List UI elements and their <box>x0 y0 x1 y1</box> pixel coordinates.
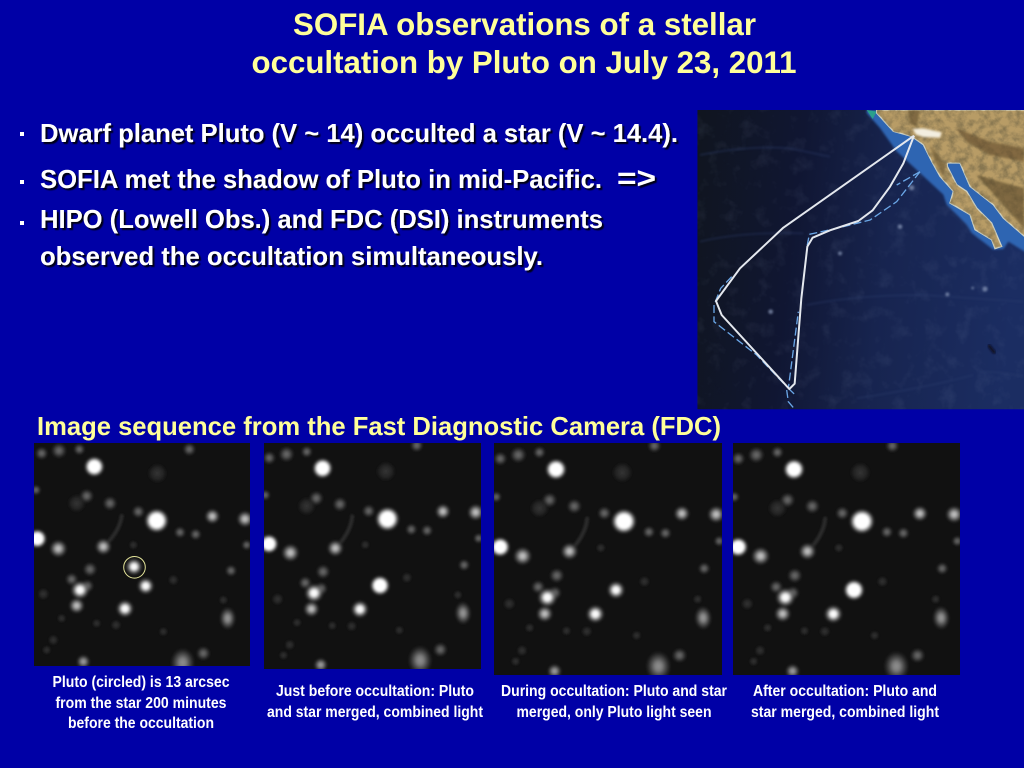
caption 3: During occultation: Pluto and star <box>501 683 727 700</box>
caption 4: After occultation: Pluto and <box>753 683 937 700</box>
caption 1: before the occultation <box>68 715 214 732</box>
bullet 1: Dwarf planet Pluto (V ~ 14) occulted a star (V ~ 14.4). <box>40 118 678 148</box>
actual flight track (solid) <box>716 136 914 389</box>
Pluto <box>125 558 143 576</box>
caption 3 <box>501 683 727 721</box>
panel: image 2, just before occultation <box>264 443 481 669</box>
caption 1 <box>52 674 230 732</box>
bullet 3: observed the occultation simultaneously. <box>40 241 543 271</box>
panel: image 3, during occultation <box>494 443 722 675</box>
bullet 2: SOFIA met the shadow of Pluto in mid-Pacific. <box>40 164 602 194</box>
caption 4: star merged, combined light <box>751 704 940 721</box>
continental shelf <box>867 110 1024 256</box>
land: mainland and Baja California <box>870 110 1024 253</box>
bullet 3 <box>20 204 603 271</box>
title: occultation by Pluto on July 23, 2011 <box>252 45 796 80</box>
caption 2: and star merged, combined light <box>267 704 484 721</box>
panel: image 4, after occultation <box>733 443 960 675</box>
title <box>252 7 796 80</box>
heading: image sequence: Image sequence from the Fast Diagnostic Camera (FDC) <box>37 413 721 441</box>
caption 2 <box>267 683 484 721</box>
merged Pluto and star <box>370 575 390 596</box>
planned flight route (dashed) <box>714 172 920 408</box>
star near Pluto <box>137 577 155 595</box>
panel: image 1, before occultation <box>27 443 254 678</box>
bullet 2: => <box>617 162 656 195</box>
caption 2: Just before occultation: Pluto <box>276 683 474 700</box>
bullet 3: HIPO (Lowell Obs.) and FDC (DSI) instruments <box>40 204 603 234</box>
sea floor texture <box>698 112 994 408</box>
circle marking Pluto <box>124 556 145 578</box>
caption 4 <box>751 683 940 721</box>
merged star, Pluto light only <box>607 581 625 599</box>
city lights: Los Angeles <box>913 128 942 138</box>
title: SOFIA observations of a stellar <box>293 7 756 42</box>
merged Pluto and star <box>843 579 865 601</box>
map: SOFIA flight path over the Pacific <box>697 110 1024 409</box>
bullet list <box>20 118 678 271</box>
caption 1: from the star 200 minutes <box>56 695 227 712</box>
caption 1: Pluto (circled) is 13 arcsec <box>52 674 230 691</box>
caption 3: merged, only Pluto light seen <box>516 704 712 721</box>
